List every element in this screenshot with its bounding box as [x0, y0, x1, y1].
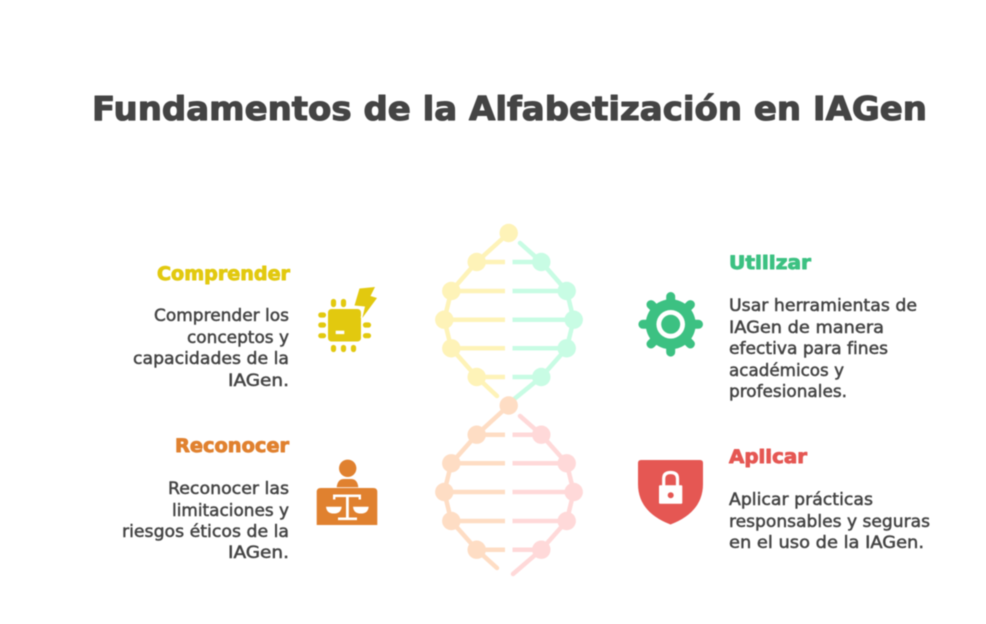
icon: chip with lightning bolt — [321, 287, 377, 350]
text block: Aplicar description: en el uso de la IAGen. — [729, 533, 924, 552]
panel: Aplicar — [638, 446, 930, 552]
text block: Comprender description: conceptos y — [187, 328, 289, 347]
text block: Utilizar description: efectiva para fines — [729, 339, 888, 358]
heading: Comprender: Comprender — [157, 263, 291, 285]
text block: Comprender description: Comprender los — [154, 306, 289, 325]
text block: Reconocer description: Reconocer las — [168, 479, 289, 498]
heading: Utilizar: Utilizar — [729, 252, 812, 274]
text block: Aplicar description: Aplicar prácticas — [729, 490, 873, 509]
heading: Aplicar: Aplicar — [729, 446, 808, 468]
text block: Reconocer description: riesgos éticos de la — [122, 522, 289, 541]
text block: Comprender description — [133, 306, 289, 390]
text block: Aplicar description: responsables y seguras — [729, 512, 930, 531]
icon: person at desk with scales — [317, 460, 377, 525]
icon: gear — [643, 296, 698, 352]
lower left strand: peach — [435, 396, 518, 568]
heading: Reconocer: Reconocer — [175, 435, 290, 457]
panel: Reconocer — [122, 435, 377, 562]
panel: Utilizar — [643, 252, 917, 401]
text block: Aplicar description — [729, 490, 930, 552]
text block: Reconocer description — [122, 479, 289, 562]
panel: Comprender — [133, 263, 377, 390]
lower right strand: pink — [512, 416, 583, 574]
text block: Reconocer description: IAGen. — [228, 543, 289, 562]
text block: Utilizar description — [729, 296, 917, 401]
chart: DNA helix — [435, 224, 583, 574]
text block: Utilizar description: profesionales. — [729, 382, 847, 401]
title: Fundamentos de la Alfabetización en IAGen — [92, 89, 927, 128]
text block: Comprender description: capacidades de la — [133, 349, 289, 368]
text block: Utilizar description: académicos y — [729, 361, 844, 380]
text block: Utilizar description: Usar herramientas de — [729, 296, 917, 315]
upper right strand: mint — [512, 243, 583, 400]
text block: Utilizar description: IAGen de manera — [729, 318, 884, 337]
upper left strand: yellow — [435, 224, 518, 396]
icon: shield with padlock — [638, 460, 703, 524]
text block: Reconocer description: limitaciones y — [172, 501, 289, 520]
text block: Comprender description: IAGen. — [228, 371, 289, 390]
